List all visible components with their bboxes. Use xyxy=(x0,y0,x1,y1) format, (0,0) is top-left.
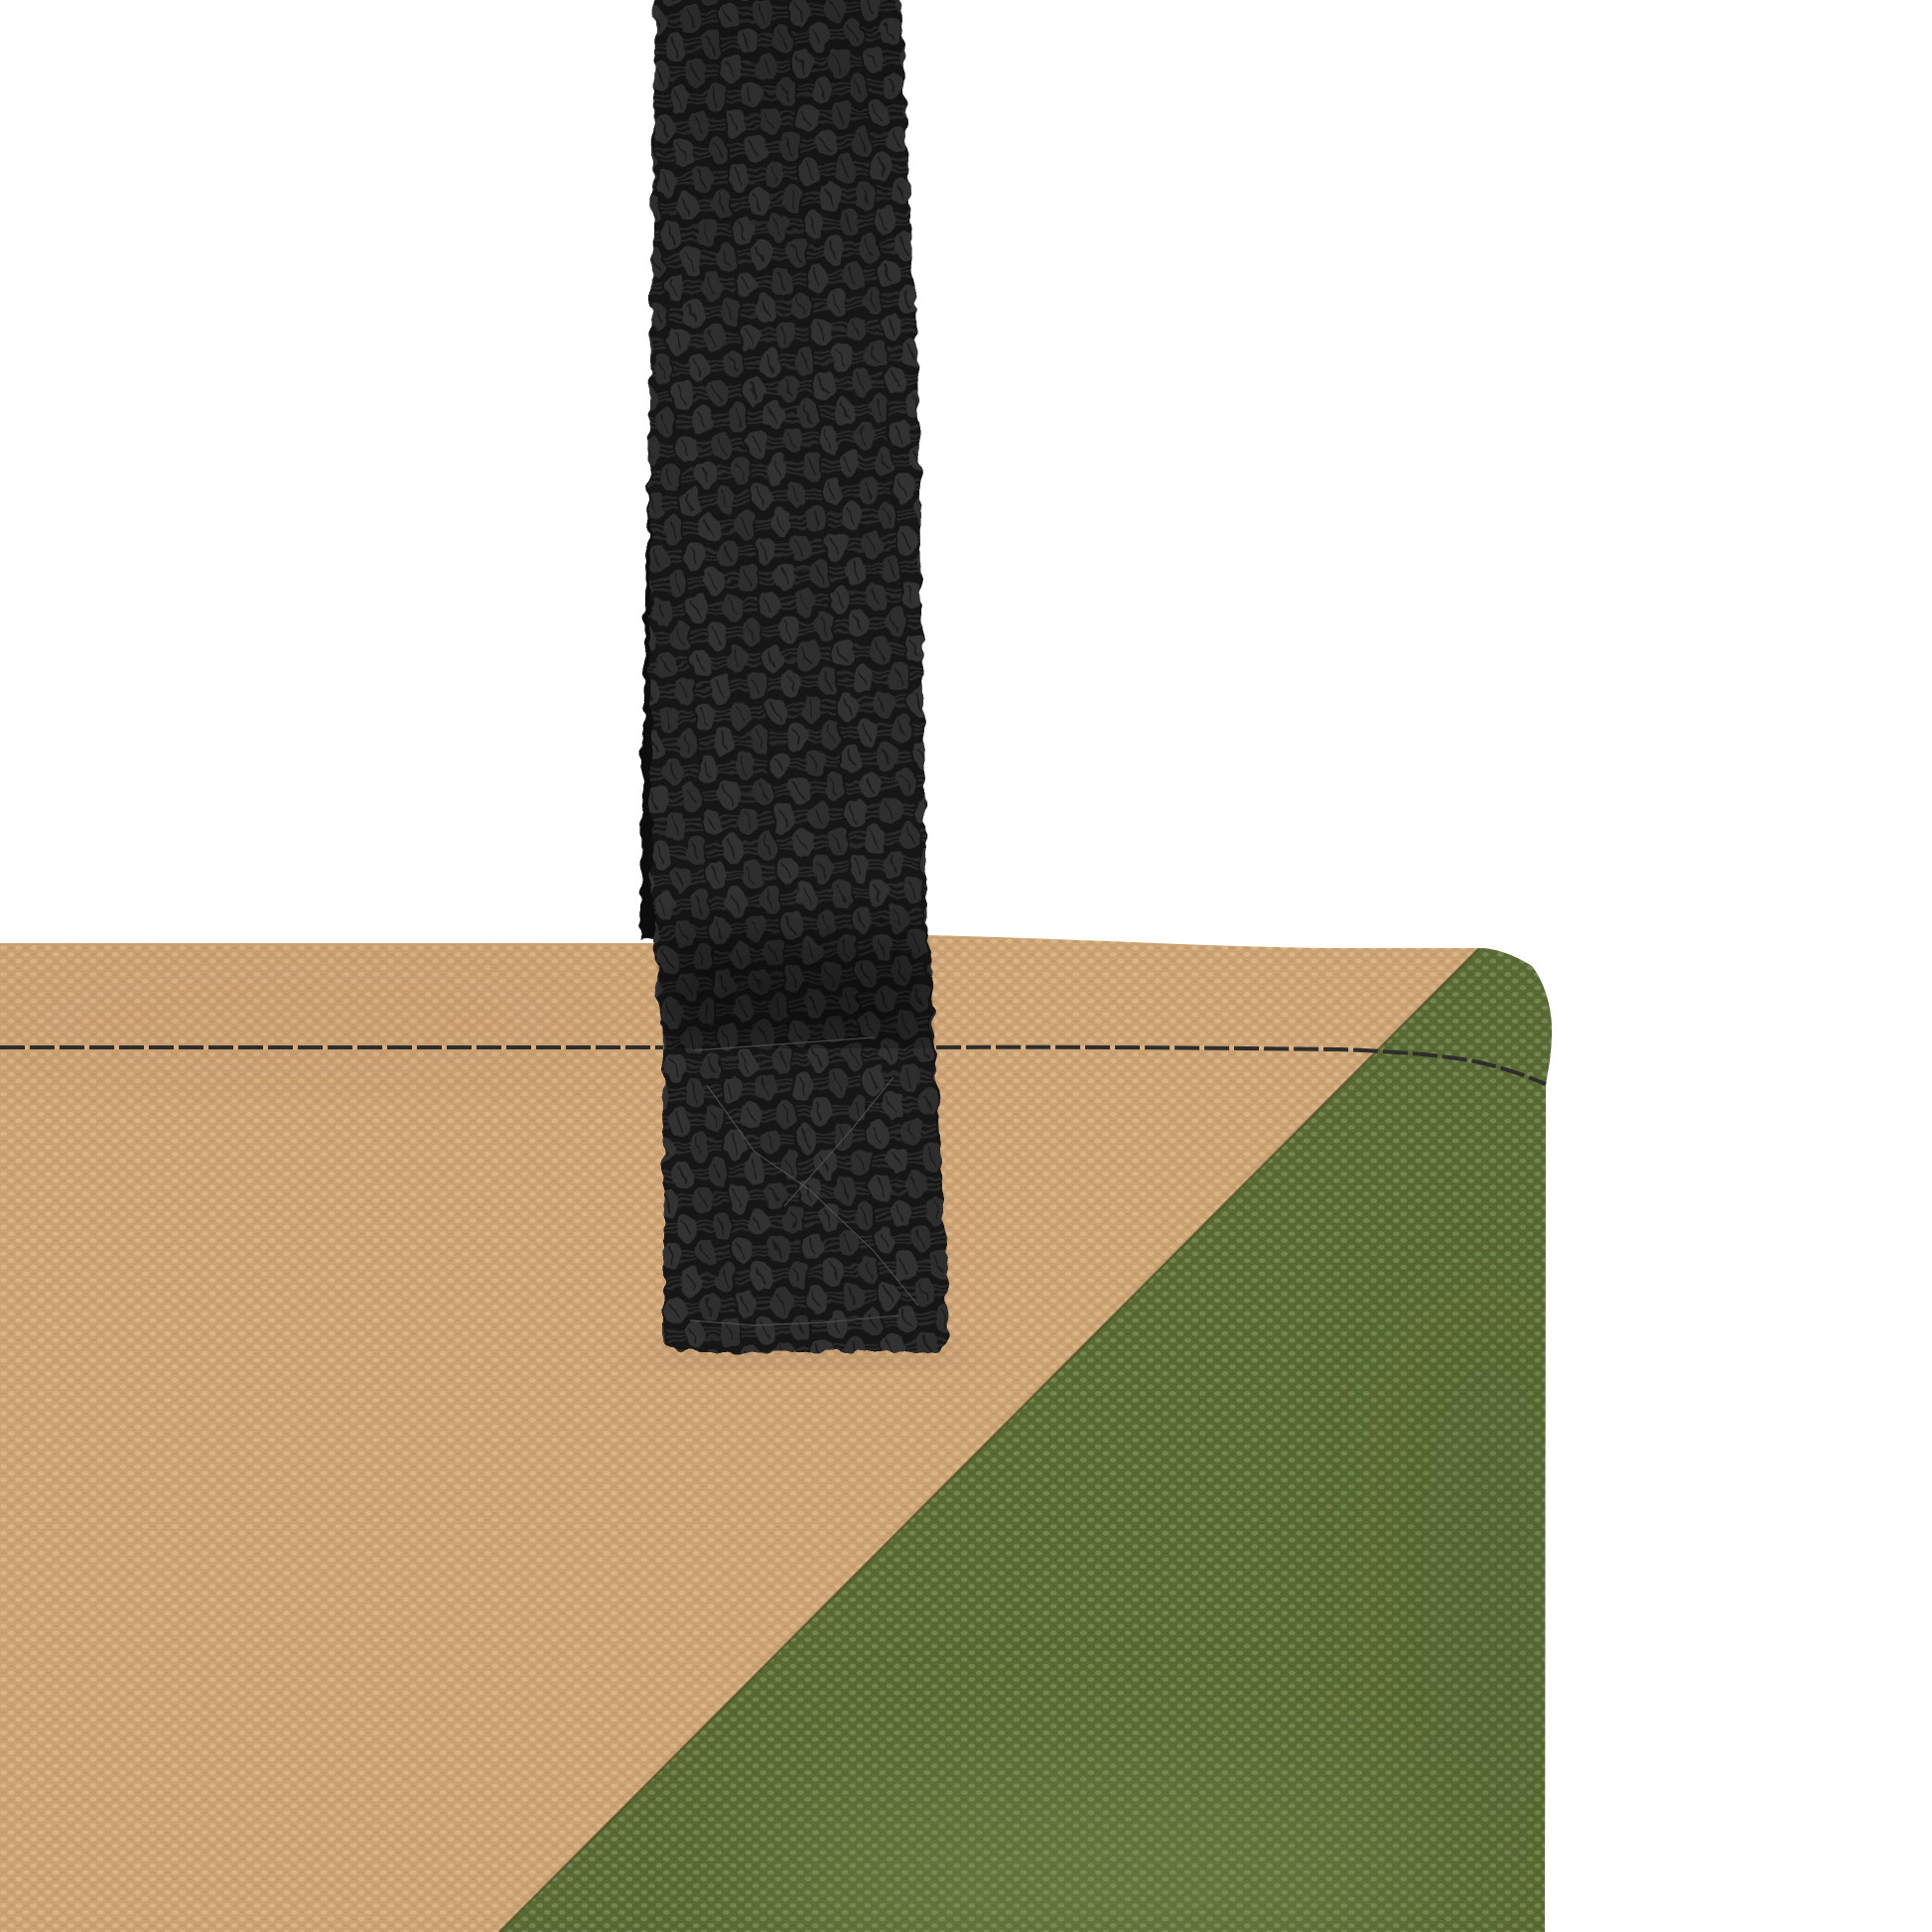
strap body xyxy=(649,0,948,1352)
strap shading xyxy=(653,0,933,1048)
tan fabric panel xyxy=(0,923,1588,1932)
green fabric panel xyxy=(499,923,1588,1932)
tan fabric shading xyxy=(0,978,715,1067)
green fabric shading xyxy=(836,1400,1545,1932)
strap fold stitching xyxy=(690,1037,918,1325)
stitching right xyxy=(936,1047,1546,1084)
strap darker band above fold xyxy=(663,938,929,1042)
strap rear layer xyxy=(640,0,695,948)
stitching left xyxy=(0,1045,663,1049)
bag body xyxy=(0,923,1588,1932)
black woven strap xyxy=(649,0,948,1352)
strap contact shadow xyxy=(687,1349,928,1370)
diagonal seam edge xyxy=(499,948,1479,1932)
